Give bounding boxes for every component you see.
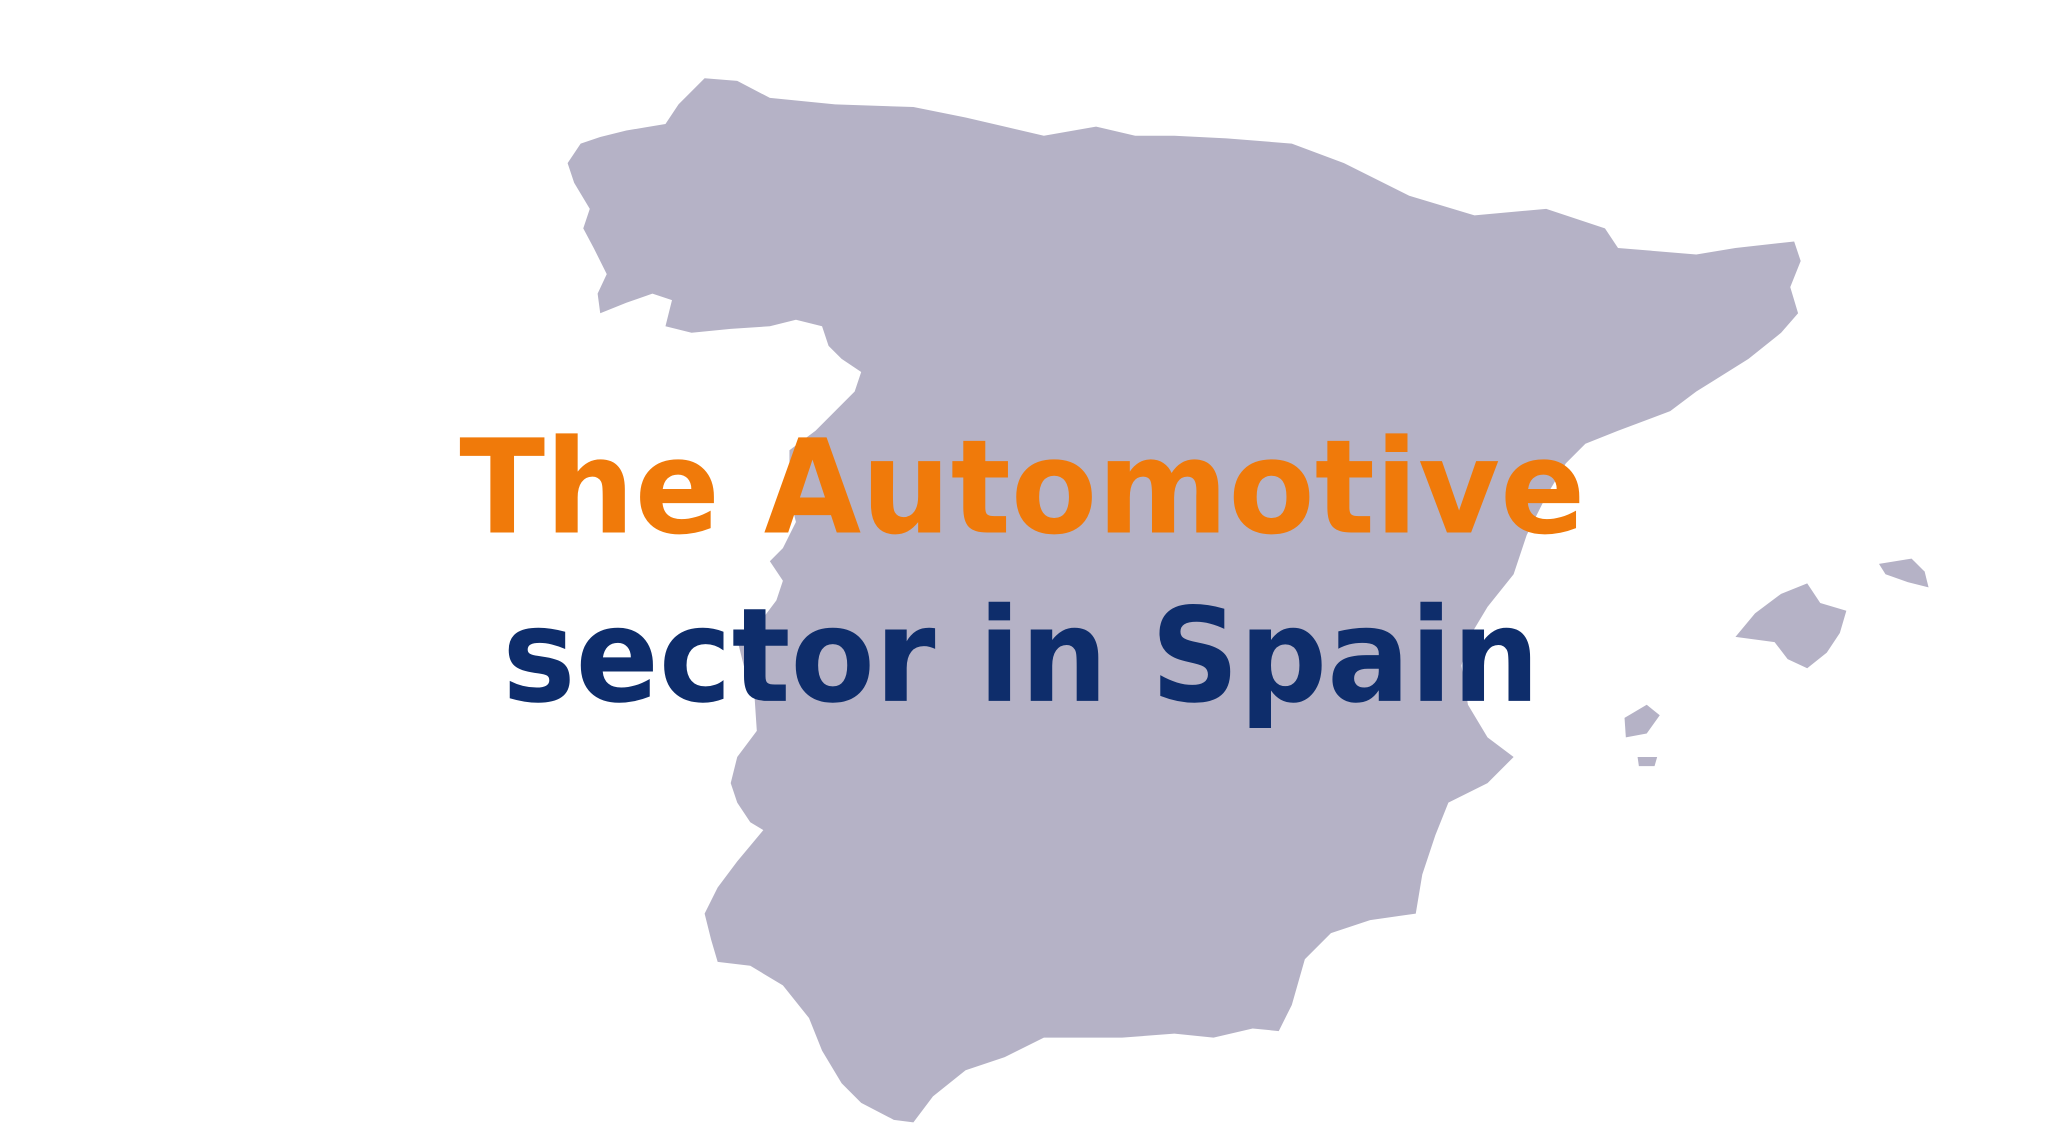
map: Spain silhouette	[568, 78, 1929, 1122]
island: Mallorca	[1735, 583, 1846, 668]
title line 1: The Automotive	[459, 411, 1585, 564]
island: Ibiza	[1625, 705, 1660, 737]
island: Menorca	[1879, 559, 1929, 587]
title line 2: sector in Spain	[502, 580, 1540, 732]
